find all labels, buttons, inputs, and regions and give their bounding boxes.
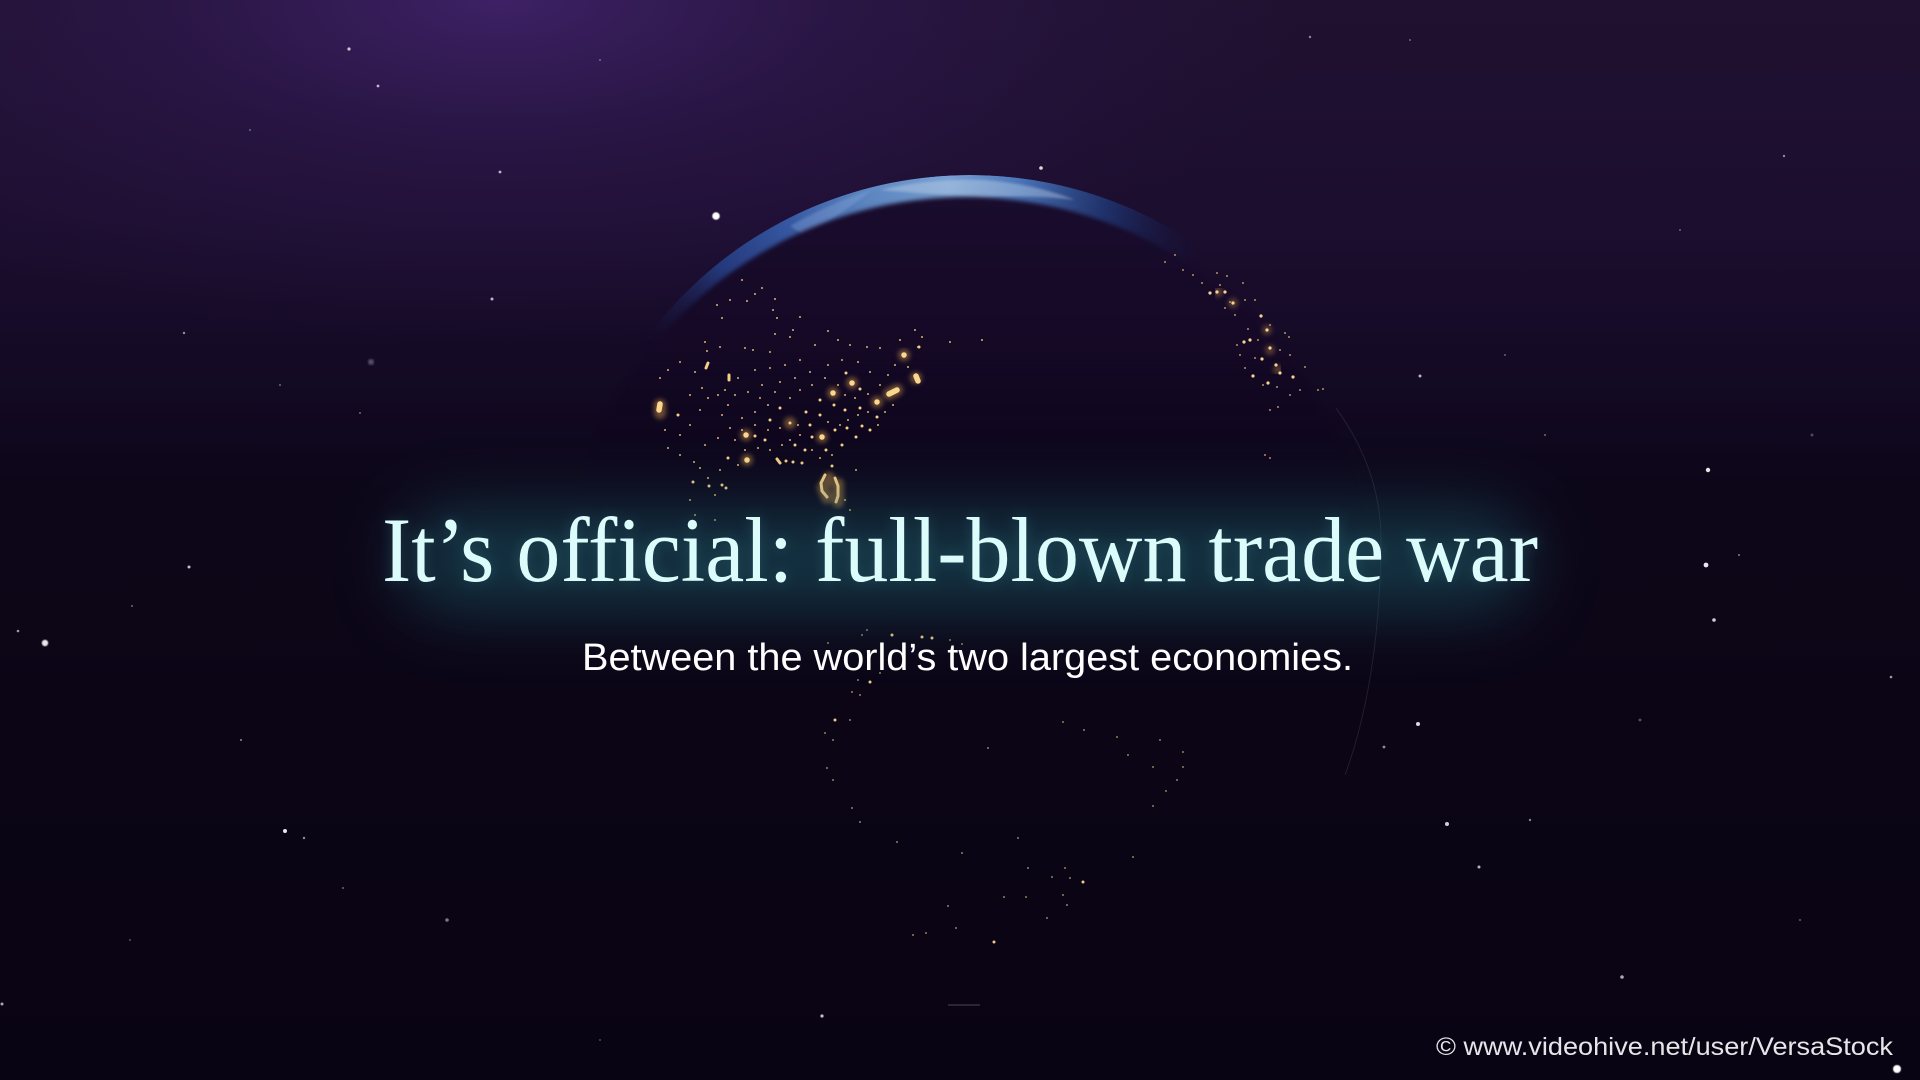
title glow: [400, 510, 1530, 610]
globe: faint right limb: [1336, 408, 1381, 775]
title: It’s official: full-blown trade war: [382, 499, 1538, 601]
globe: blue atmosphere crescent with dark interior: [661, 175, 1174, 323]
title: It’s official: full-blown trade war: [382, 499, 1538, 601]
city lights: North America: [659, 280, 982, 520]
copyright credit: © www.videohive.net/user/VersaStock: [1436, 1033, 1894, 1061]
globe: [661, 175, 1382, 1006]
subtitle: Between the world’s two largest economies.: [582, 637, 1353, 679]
city lights: Europe and Africa edge: [1165, 255, 1323, 458]
city lights: Central and South America: [825, 630, 1183, 942]
globe: South Pole glint: [948, 1004, 980, 1006]
